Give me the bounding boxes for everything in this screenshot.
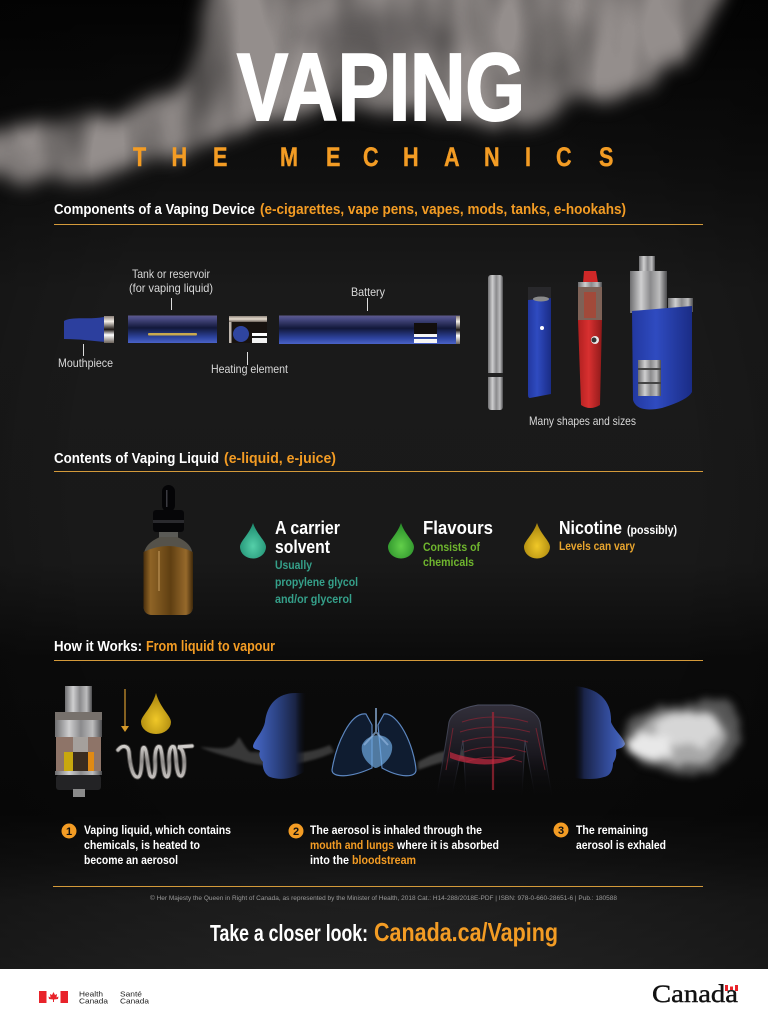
step 2 text: [310, 823, 499, 867]
step 3 text: The remaining: [576, 823, 648, 837]
carrier solvent text: and/or glycerol: [275, 592, 352, 606]
step 1 text: chemicals, is heated to: [84, 838, 200, 852]
panel: liquid to vapour diagram: [55, 686, 742, 797]
badge 2: [288, 824, 304, 838]
carrier solvent text: Usually: [275, 558, 312, 572]
step 2 text: The aerosol is inhaled through the: [310, 823, 482, 837]
canada wordmark: Canada: [652, 981, 738, 1008]
footer: [0, 969, 768, 1024]
heading: contents: [54, 451, 336, 467]
call to action: Take a closer look:: [210, 920, 368, 946]
badge 3: 3: [558, 825, 564, 837]
icon: green drop: [388, 523, 414, 558]
heading: how it works: From liquid to vapour: [146, 639, 275, 655]
mouthpiece: [58, 316, 114, 370]
step 2 text: where it is absorbed: [396, 838, 499, 852]
battery: Battery: [351, 285, 385, 299]
panel: flavours: [388, 518, 493, 569]
icon: canadian flag: [39, 991, 68, 1003]
flavours text: Consists of: [423, 540, 481, 554]
step 2 text: mouth and lungs: [310, 838, 394, 852]
carrier solvent text: A carrier: [275, 518, 340, 538]
icon: yellow drop: [524, 523, 550, 558]
smoke plume: [0, 0, 735, 181]
heading: how it works: [54, 639, 275, 655]
icon: lungs: [332, 708, 416, 776]
mouthpiece: Mouthpiece: [58, 356, 113, 370]
copyright: © Her Majesty the Queen in Right of Canada, as represented by the Minister of Health, 2018 Cat.: H14-288/2018E-PDF | ISBN: 978-0-660-28651-6 | Pub.: 180588: [150, 895, 618, 902]
step 3 text: [576, 823, 666, 852]
health canada wordmark: Health: [79, 990, 103, 998]
flavours text: Flavours: [423, 518, 493, 538]
icon: torso with bloodstream: [437, 705, 552, 795]
step 1 text: become an aerosol: [84, 853, 178, 867]
panel: carrier solvent: [240, 518, 358, 606]
carrier solvent text: [275, 518, 358, 606]
flavours text: chemicals: [423, 555, 474, 569]
heading: how it works: How it Works:: [54, 639, 142, 655]
title: VAPING: [237, 34, 525, 141]
badge 2: 2: [293, 826, 299, 838]
heading: components: (e-cigarettes, vape pens, vapes, mods, tanks, e-hookahs): [260, 202, 626, 218]
step 2 text: bloodstream: [352, 853, 416, 867]
health canada wordmark: [79, 990, 150, 1006]
icon: yellow drop: [141, 693, 171, 734]
red pen: [578, 271, 602, 408]
call to action: Canada.ca/Vaping: [374, 917, 558, 947]
step 3: [554, 822, 666, 852]
battery: [279, 285, 460, 344]
icon: teal drop: [240, 523, 266, 558]
carrier solvent text: solvent: [275, 537, 330, 557]
panel: device components: [58, 267, 460, 376]
heading: contents: (e-liquid, e-juice): [224, 451, 336, 467]
nicotine text: Levels can vary: [559, 539, 635, 553]
panel: many shapes and sizes: [488, 256, 693, 428]
tank: (for vaping liquid): [129, 281, 213, 295]
heading: components: [54, 202, 626, 218]
step 2 text: into the: [310, 853, 349, 867]
panel: nicotine: [524, 518, 677, 558]
tank: Tank or reservoir: [132, 267, 210, 281]
health canada wordmark: Santé: [120, 990, 142, 998]
step 2: [288, 823, 499, 867]
call to action: [210, 917, 558, 947]
box mod: [630, 256, 693, 409]
icon: head inhaling: [253, 693, 306, 779]
subtitle: THE MECHANICS: [133, 143, 613, 173]
health canada wordmark: Canada: [79, 996, 109, 1006]
icon: vapour cloud: [626, 699, 742, 774]
icon: head exhaling: [574, 686, 625, 779]
step 1: [62, 823, 231, 867]
tank: [128, 267, 217, 343]
flavours text: [423, 518, 493, 569]
step 1 text: Vaping liquid, which contains: [84, 823, 231, 837]
heating element: [211, 316, 289, 376]
icon: e-liquid bottle: [144, 485, 193, 615]
badge 1: 1: [66, 826, 72, 838]
nicotine text: (possibly): [627, 523, 677, 537]
icon: coil: [118, 746, 192, 777]
step 1 text: [84, 823, 231, 867]
nicotine text: [559, 518, 677, 553]
silver pen: [488, 275, 503, 410]
health canada wordmark: Canada: [120, 996, 150, 1006]
step 3 text: aerosol is exhaled: [576, 838, 666, 852]
carrier solvent text: propylene glycol: [275, 575, 358, 589]
smoke trail: [200, 737, 474, 770]
arrow: [121, 689, 129, 732]
blue pod: [528, 287, 551, 398]
heading: contents: Contents of Vaping Liquid: [54, 451, 219, 467]
heating element: Heating element: [211, 362, 289, 376]
nicotine text: Nicotine: [559, 518, 622, 538]
badge 1: [62, 824, 76, 838]
heading: components: Components of a Vaping Device: [54, 202, 255, 218]
icon: tank: [55, 686, 102, 797]
label: many shapes and sizes: Many shapes and sizes: [529, 414, 636, 428]
